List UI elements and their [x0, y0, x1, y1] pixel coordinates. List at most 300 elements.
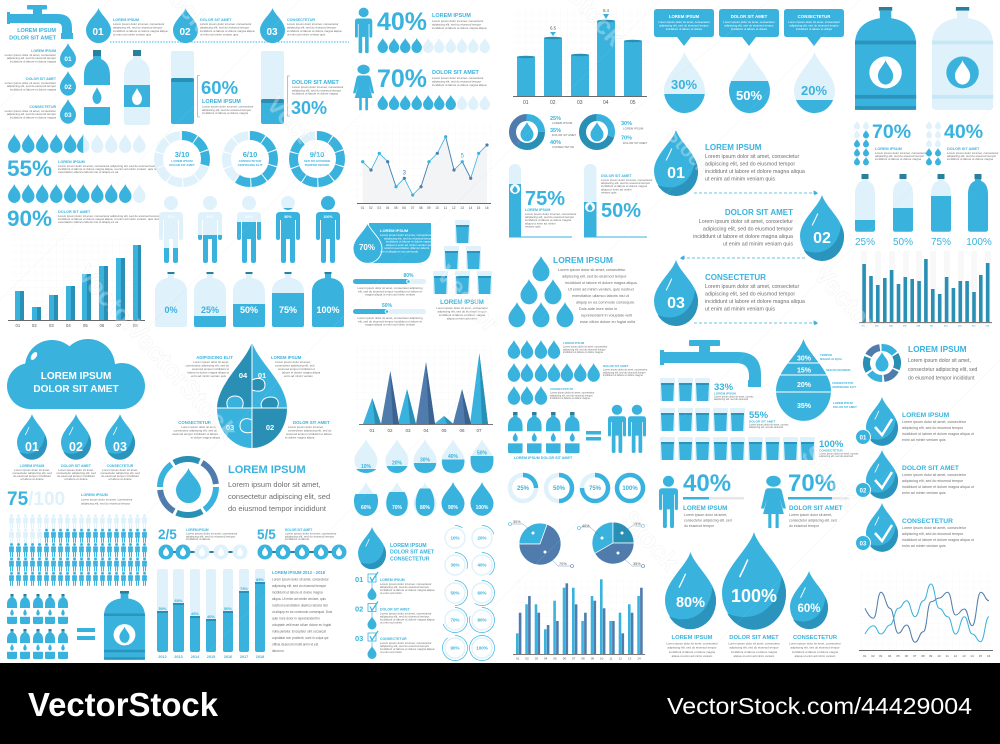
- wave chart: 16: [987, 654, 991, 658]
- donut values: 100%: [622, 486, 638, 492]
- step text 02: adipiscing elit, sed do eiusmod tempor: [703, 226, 793, 232]
- ring 6/10: CONSECTETUR: [239, 159, 261, 163]
- bottle 75%: 75%: [931, 237, 951, 248]
- step 01: LOREM IPSUM: [380, 578, 405, 582]
- legend: DOLOR SIT AMET: [623, 141, 647, 145]
- legend: LOREM IPSUM: [552, 121, 573, 125]
- bar chart: 19 bars: 007: [903, 326, 907, 328]
- drop item 01: incididunt ut labore et dolore magna: [10, 59, 56, 63]
- cups 55%: [660, 408, 745, 431]
- caption 100%: aliqua ut enim ad minim veniam: [734, 654, 775, 658]
- ring values: 60%: [477, 591, 487, 596]
- puzzle: [217, 342, 287, 448]
- label consectetur: consectetur adipiscing elit, sed do: [174, 428, 217, 432]
- line chart: 08: [419, 206, 423, 210]
- value: 30%: [291, 98, 327, 118]
- cloud heading: LOREM IPSUM: [41, 371, 111, 382]
- card text: incididunt ut labore et dolore magna: [386, 240, 432, 244]
- jug: [104, 591, 145, 660]
- wave chart: 10: [937, 654, 941, 658]
- pie chart 40 15 35: 35%: [633, 562, 641, 566]
- piece numbers: 04: [239, 371, 248, 380]
- text 40%: incididunt ut labore et dolore magna: [947, 157, 993, 161]
- box 3: adipiscing elit, sed do eiusmod tempor: [789, 23, 839, 27]
- watermark: Vector: [261, 89, 336, 168]
- panel: man 40%: [355, 8, 490, 53]
- triangle chart: [354, 345, 493, 433]
- text: Ut enim ad minim veniam, quis nostrud: [568, 288, 634, 292]
- caption 80%: incididunt ut labore et dolore magna: [669, 650, 715, 654]
- label: Lorem ipsum dolor sit amet, consectetur: [202, 104, 253, 108]
- blue arcs: [510, 475, 643, 501]
- text 55%: 55%: [749, 410, 769, 421]
- bar chart: 19 bars: [859, 251, 992, 328]
- progress bar 80%: Lorem ipsum dolor sit amet, consectetur adipiscing: [357, 286, 423, 290]
- drop item 01: LOREM IPSUM: [31, 49, 56, 53]
- panel: cup rows: [660, 378, 859, 460]
- people grid: [8, 514, 148, 586]
- text: adipiscing elit, sed do eiusmod tempor: [432, 80, 481, 84]
- label: Lorem ipsum dolor sit amet, consectetur: [292, 85, 343, 89]
- row 1 text: LOREM IPSUM: [563, 341, 585, 345]
- check text 03: adipiscing elit, sed do eiusmod tempor: [902, 532, 964, 536]
- bar chart: 01 to 08: 04: [66, 323, 71, 328]
- caption 60%: aliqua ut enim ad minim veniam: [795, 654, 836, 658]
- caption 100%: DOLOR SIT AMET: [729, 635, 779, 641]
- text: Lorem ipsum dolor sit amet,: [908, 358, 971, 364]
- panel: cup pyramid: [433, 220, 492, 320]
- heading: DOLOR SIT AMET: [9, 36, 57, 42]
- drop 03: 03: [266, 27, 278, 38]
- panel: speech boxes with filled drops: [654, 9, 844, 113]
- wave chart: 09: [929, 654, 933, 658]
- piece numbers: 01: [258, 371, 266, 380]
- triangle chart: 06: [459, 428, 465, 433]
- step 01: ut enim ad minim: [380, 591, 403, 595]
- jug 0%: 0%: [164, 305, 178, 315]
- text: incididunt ut labore et dolore magna aliqua.: [565, 281, 638, 285]
- label: incididunt ut labore et dolore magna: [292, 92, 338, 96]
- step 01: Lorem ipsum dolor sit amet, consectetur: [380, 582, 431, 586]
- drops: [378, 95, 490, 110]
- value: 40%: [683, 470, 731, 497]
- text: incididunt ut labore et dolore magna aliqua: [432, 83, 487, 87]
- light drops row 2: [354, 482, 436, 516]
- person 40%: [198, 196, 222, 263]
- ring values: 30%: [450, 563, 460, 568]
- step 03: [355, 631, 435, 659]
- separators: [776, 363, 833, 392]
- bar chart: 01 to 08: 03: [49, 323, 54, 328]
- label: LOREM IPSUM: [202, 99, 241, 105]
- text: voluptate velit esse cillum dolore eu fugiat: [272, 623, 331, 627]
- text: do eiusmod tempor: [684, 524, 715, 528]
- drop 60%: [790, 571, 828, 629]
- drop 02: 02: [179, 27, 191, 38]
- panel: drop card 70%: [353, 223, 433, 263]
- labels row 1: 10%: [361, 464, 372, 470]
- box 3: incididunt ut labore et dolore: [796, 27, 833, 31]
- text: aliqua ut enim ad minim: [525, 221, 556, 225]
- text: LOREM IPSUM: [440, 299, 484, 306]
- bar chart: cylinders: [513, 8, 647, 106]
- text: adipiscing elit, sed do eiusmod tempor: [525, 215, 574, 219]
- text 55%: Lorem ipsum dolor sit amet, consec: [749, 424, 789, 426]
- check text 02: adipiscing elit, sed do eiusmod tempor: [902, 479, 964, 483]
- box 1: [654, 9, 714, 46]
- caption 60%: adipiscing elit, sed do eiusmod tempor: [790, 646, 840, 650]
- jug 25%: 25%: [201, 305, 219, 315]
- person 100%: 100%: [323, 215, 333, 219]
- person 100%: [316, 196, 340, 263]
- bar chart: paired bars: 03: [535, 656, 538, 660]
- text: consectetur adipiscing elit, sed: [684, 518, 732, 522]
- drop grid 40%: [926, 121, 941, 165]
- value 40%: 40%: [944, 121, 983, 143]
- box 3: Lorem ipsum dolor sit amet, consectetur: [788, 20, 840, 24]
- step 02: DOLOR SIT AMET: [380, 608, 411, 612]
- jug 50%: 50%: [240, 305, 258, 315]
- legend: LOREM IPSUM: [623, 126, 644, 130]
- ring values: 100%: [476, 646, 488, 651]
- jug 75%: [272, 272, 304, 327]
- side labels: ADIPISICING ELIT: [832, 385, 856, 389]
- value: 2/5: [158, 527, 177, 542]
- triangle chart: 07: [476, 428, 482, 433]
- text 70%: incididunt ut labore et dolore magna: [875, 157, 921, 161]
- text: DOLOR SIT AMET: [285, 528, 312, 532]
- drop item 01: adipiscing elit, sed do eiusmod tempor: [7, 56, 56, 60]
- progress bar 80%: 80%: [403, 273, 414, 279]
- panel: striped drop: [776, 339, 857, 421]
- text 70%: Lorem ipsum dolor sit amet, consectetur: [875, 151, 926, 155]
- bar chart: 19 bars: 015: [958, 326, 962, 328]
- text: aliquip ex ea commodo consequat.: [576, 300, 635, 304]
- text 70%: LOREM IPSUM: [875, 147, 902, 151]
- bar chart: 19 bars: 009: [916, 326, 921, 328]
- drop item 02: incididunt ut labore et dolore magna: [10, 87, 56, 91]
- drop 02: [173, 8, 198, 43]
- ring 6/10: [226, 136, 274, 182]
- panel: drop count rows: [508, 340, 648, 405]
- legend: 40%: [550, 140, 561, 146]
- text block 03: adipiscing elit, sed do eiusmod tempor: [287, 26, 336, 30]
- heading: LOREM IPSUM: [390, 543, 427, 549]
- drop 02: 02: [813, 230, 831, 247]
- drop item 03: CONSECTETUR: [29, 105, 56, 109]
- text: LOREM IPSUM: [186, 528, 209, 532]
- progress bar 50%: magna aliqua ut enim ad minim veniam: [365, 323, 416, 327]
- text: DOLOR SIT AMET: [789, 505, 843, 512]
- bar chart: paired bars: 05: [553, 656, 557, 660]
- icon: boy: [659, 476, 678, 528]
- cloud heading: DOLOR SIT AMET: [33, 384, 119, 395]
- drop 03: 03: [113, 440, 127, 454]
- row 2 text: Lorem ipsum dolor sit amet, consectetur: [603, 368, 648, 372]
- drop item 02: [5, 71, 76, 96]
- text: Lorem ipsum dolor sit amet,: [684, 513, 727, 517]
- ring values: 20%: [477, 536, 487, 541]
- text: Duis aute irure dolor in: [579, 307, 617, 311]
- wave chart: 01: [863, 654, 867, 658]
- text: adipiscing elit, sed do eiusmod tempor: [81, 502, 130, 506]
- legend: 70%: [621, 136, 632, 142]
- text: adipiscing elit, sed do eiusmod tempor: [285, 534, 334, 538]
- line chart: 14: [469, 206, 472, 210]
- caption 60%: CONSECTETUR: [793, 635, 838, 641]
- label adipiscing: consectetur adipiscing elit, sed do: [186, 364, 229, 368]
- side labels: LOREM IPSUM: [833, 401, 853, 405]
- icon: blue bottle: [84, 50, 110, 125]
- bar chart: 19 bars: 003: [875, 326, 879, 328]
- bottle grid: [7, 594, 68, 659]
- labels row 1: 30%: [420, 458, 431, 464]
- line chart: 01: [361, 206, 364, 210]
- value: 40%: [377, 8, 427, 36]
- caption 80%: adipiscing elit, sed do eiusmod tempor: [667, 646, 717, 650]
- value: 75%: [525, 188, 565, 210]
- ring 3/10: LOREM IPSUM: [171, 159, 193, 163]
- text: LOREM IPSUM 2012 - 2018: [272, 570, 326, 575]
- label dolor: consectetur adipiscing elit, sed do: [288, 428, 332, 432]
- text: DOLOR SIT AMET: [432, 70, 479, 76]
- wave chart: 13: [962, 654, 966, 658]
- label adipiscing: eiusmod tempor incididunt ut: [192, 367, 229, 371]
- text block 02: ut enim ad minim veniam quis: [200, 32, 239, 36]
- donut values: 75%: [589, 486, 602, 492]
- text: aliqua ut enim ad minim: [601, 187, 632, 191]
- text: adipiscing elit, sed do eiusmod tempor: [437, 310, 487, 314]
- card text: adipiscing elit, sed do eiusmod tempor: [384, 236, 433, 240]
- drop 80%: 80%: [676, 595, 705, 611]
- text: incididunt ut labore et dolore magna: [439, 313, 485, 317]
- check text 03: incididunt ut labore et dolore magna aliqua ut: [902, 538, 974, 542]
- cups: [433, 220, 492, 294]
- line chart: 02: [369, 206, 373, 210]
- cloud: [7, 339, 145, 409]
- box 2: adipiscing elit, sed do eiusmod tempor: [724, 23, 774, 27]
- panel: numbered steps: [654, 130, 844, 326]
- jug 100%: [312, 272, 344, 327]
- text 33%: LOREM IPSUM: [714, 392, 736, 396]
- line chart: 09: [427, 206, 431, 210]
- text: Lorem ipsum dolor sit amet, consectetur: [81, 498, 132, 502]
- text: esse cillum dolore eu fugiat nulla: [580, 320, 636, 324]
- text: incididunt ut labore et dolore magna: [272, 590, 323, 594]
- ring: [861, 342, 903, 384]
- drop: [176, 468, 201, 503]
- step 01: [355, 572, 435, 600]
- wave chart: 15: [979, 654, 982, 658]
- equals sign: [77, 628, 95, 640]
- line chart: 16: [485, 206, 489, 210]
- text: Lorem ipsum dolor sit amet, consectetur: [432, 76, 483, 80]
- panel: bottles equal people: [508, 405, 646, 460]
- line chart: 12: [452, 206, 456, 210]
- value: 70%: [788, 470, 836, 497]
- side labels: DOLOR SIT AMET: [833, 405, 857, 409]
- text block 03: CONSECTETUR: [287, 18, 315, 22]
- person 80%: 80%: [284, 215, 292, 219]
- caption 03: consectetur adipiscing elit, sed: [100, 471, 140, 475]
- text 55%: DOLOR SIT AMET: [749, 420, 775, 424]
- progress bar 50%: Lorem ipsum dolor sit amet, consectetur adipiscing: [357, 316, 423, 320]
- step 02: ut enim ad minim: [380, 620, 403, 624]
- text: do eiusmod tempor incididunt: [908, 376, 975, 382]
- label: adipiscing elit, sed do eiusmod tempor: [292, 88, 341, 92]
- drop 03: [654, 260, 698, 326]
- ring values: 80%: [477, 618, 487, 623]
- ring 6/10: ADIPISCING ELIT: [238, 163, 263, 167]
- tube values: 50%: [158, 606, 167, 611]
- panel: checklist: [355, 527, 435, 659]
- line chart: 06: [402, 206, 406, 210]
- bracket: [288, 76, 290, 116]
- footer url: VectorStock.com/44429004: [667, 693, 972, 719]
- bar chart: cylinders: 6.5: [550, 26, 557, 30]
- panel: cylinder 30%: [261, 51, 343, 124]
- side labels: MAGNA ALIQUA: [820, 357, 842, 361]
- triangle chart: 02: [387, 428, 393, 433]
- text 100%: 100%: [819, 439, 844, 450]
- drop item 01: Lorem ipsum dolor sit amet, consectetur: [5, 53, 56, 57]
- bar chart: paired bars: 06: [563, 656, 566, 660]
- ring 9/10: SED DO EIUSMOD: [304, 159, 330, 163]
- legend: 30%: [621, 121, 632, 127]
- check drop 03: 03: [860, 542, 867, 548]
- wave chart: 08: [921, 654, 925, 658]
- text block 03: ut enim ad minim veniam quis: [287, 32, 326, 36]
- heading: DOLOR SIT AMET: [390, 550, 435, 556]
- values: 15%: [797, 368, 812, 374]
- drop 01: 01: [25, 440, 39, 454]
- label consectetur: et dolore magna aliqua: [191, 436, 220, 440]
- panel: cylinder 60%: [171, 51, 253, 124]
- text: LOREM IPSUM: [81, 493, 108, 497]
- text 90%: exercitation ullamco laboris nisi ut aliquip ex ea: [58, 220, 119, 224]
- bottle 25%: 25%: [855, 237, 875, 248]
- drop 50%: 50%: [736, 88, 762, 103]
- triangle chart: 04: [423, 428, 429, 433]
- years: 2015: [207, 655, 215, 659]
- wave chart: 07: [913, 654, 917, 658]
- progress bar 80%: [353, 273, 426, 297]
- label lorem: enim ad minim veniam: [284, 374, 314, 378]
- step 02: 02: [355, 604, 363, 614]
- caption 01: LOREM IPSUM: [20, 464, 44, 468]
- panel: thermometer 75%: [509, 164, 576, 238]
- drop: [876, 352, 888, 372]
- step text 01: adipiscing elit, sed do eiusmod tempor: [705, 162, 795, 168]
- line chart: 04: [386, 206, 389, 210]
- text: Lorem ipsum dolor sit amet, consectetur: [432, 19, 483, 23]
- drop item 01: 01: [64, 56, 72, 63]
- watermark: Vector: [431, 259, 506, 338]
- label lorem: consectetur adipiscing elit, sed: [275, 364, 315, 368]
- value 55%: 55%: [7, 156, 52, 181]
- tube values: 85%: [256, 577, 264, 582]
- ring 3/10: DOLOR SIT AMET: [169, 163, 195, 167]
- text 90%: incididunt ut labore et dolore magna aliqua, ut enim ad minim veniam, quis nostrud: [58, 217, 164, 221]
- ring values: 40%: [477, 563, 487, 568]
- check text 02: Lorem ipsum dolor sit amet, consectetur: [902, 473, 967, 477]
- labels row 1: 50%: [477, 450, 488, 456]
- years: 2012: [158, 655, 167, 659]
- step text 01: Lorem ipsum dolor sit amet, consectetur: [705, 154, 799, 160]
- value 90%: 90%: [7, 206, 52, 231]
- drop 60%: 60%: [797, 603, 821, 615]
- caption 03: ut labore et dolore: [108, 477, 132, 481]
- step text 02: Lorem ipsum dolor sit amet, consectetur: [699, 219, 793, 225]
- card text: aliqua ut enim ad minim veniam quis: [386, 243, 433, 247]
- text: do eiusmod tempor incididunt: [228, 504, 327, 513]
- bar chart: 19 bars: 005: [889, 326, 893, 328]
- panel: segmented rings: [158, 136, 340, 182]
- caption: LOREM IPSUM DOLOR SIT AMET: [514, 456, 573, 460]
- text 33%: adipiscing elit, sed do eiusmod: [714, 398, 749, 401]
- label: DOLOR SIT AMET: [292, 80, 339, 86]
- filled levels row 1: [356, 456, 493, 473]
- pie chart 40 15 35: 15%: [633, 522, 641, 526]
- icon: light bottle: [124, 50, 150, 125]
- text: nulla pariatur. Excepteur sint occaecat: [272, 630, 326, 634]
- caption 02: ut labore et dolore: [64, 477, 88, 481]
- panel: tap with numbered drops: [7, 5, 349, 43]
- step text 03: adipiscing elit, sed do eiusmod tempor: [705, 292, 795, 298]
- heading: LOREM IPSUM: [908, 344, 967, 354]
- triangle chart: 03: [405, 428, 411, 433]
- caption 100%: incididunt ut labore et dolore magna: [731, 650, 777, 654]
- step text 02: incididunt ut labore et dolore magna aliqua: [693, 234, 793, 240]
- drop 20%: 20%: [801, 83, 827, 98]
- box 1: Lorem ipsum dolor sit amet, consectetur: [658, 20, 710, 24]
- text block 01: Lorem ipsum dolor sit amet, consectetur: [113, 22, 164, 26]
- panel: check drops: [856, 397, 974, 552]
- check drop 03: [856, 503, 898, 552]
- text: consectetur adipiscing elit, sed: [908, 367, 978, 373]
- drop 02: [800, 195, 844, 261]
- label adipiscing: Lorem ipsum dolor sit amet,: [193, 360, 229, 364]
- value: 5/5: [257, 527, 276, 542]
- check drop 02: 02: [860, 488, 867, 494]
- caption 60%: incididunt ut labore et dolore magna: [792, 650, 838, 654]
- text block 01: LOREM IPSUM: [113, 18, 139, 22]
- caption 03: do eiusmod tempor incididunt: [101, 474, 139, 478]
- drop 01: [17, 414, 47, 460]
- drop 30%: [664, 52, 705, 113]
- check text 02: incididunt ut labore et dolore magna aliqua ut: [902, 485, 974, 489]
- panel: drop rows 55% and 90%: [7, 134, 164, 231]
- text: incididunt ut labore et dolore magna: [525, 218, 571, 222]
- text: Lorem ipsum dolor sit amet, consectetur: [272, 578, 330, 582]
- text 70%: adipiscing elit, sed do eiusmod tempor: [875, 154, 924, 158]
- footer logo: VectorStock: [28, 686, 219, 723]
- text 55%: exercitation ullamco laboris nisi ut aliquip ex ea: [58, 170, 119, 174]
- caption 03: Lorem ipsum dolor sit amet,: [102, 468, 138, 472]
- text block 02: Lorem ipsum dolor sit amet, consectetur: [200, 22, 251, 26]
- icon: girl: [761, 476, 786, 528]
- watermark: Stock: [616, 504, 686, 577]
- bar chart: 19 bars: 011: [930, 326, 934, 328]
- bar chart: cylinders: 04: [603, 100, 609, 106]
- text: adipiscing elit, sed do eiusmod tempor: [562, 274, 627, 278]
- cylinder: [171, 51, 194, 124]
- side labels: TEMPOR: [820, 353, 832, 357]
- caption 80%: LOREM IPSUM: [672, 635, 713, 641]
- bar chart: cylinders: 02: [550, 100, 556, 106]
- heading: CONSECTETUR: [390, 556, 430, 562]
- text: adipiscing elit, sed do eiusmod tempor: [432, 23, 481, 27]
